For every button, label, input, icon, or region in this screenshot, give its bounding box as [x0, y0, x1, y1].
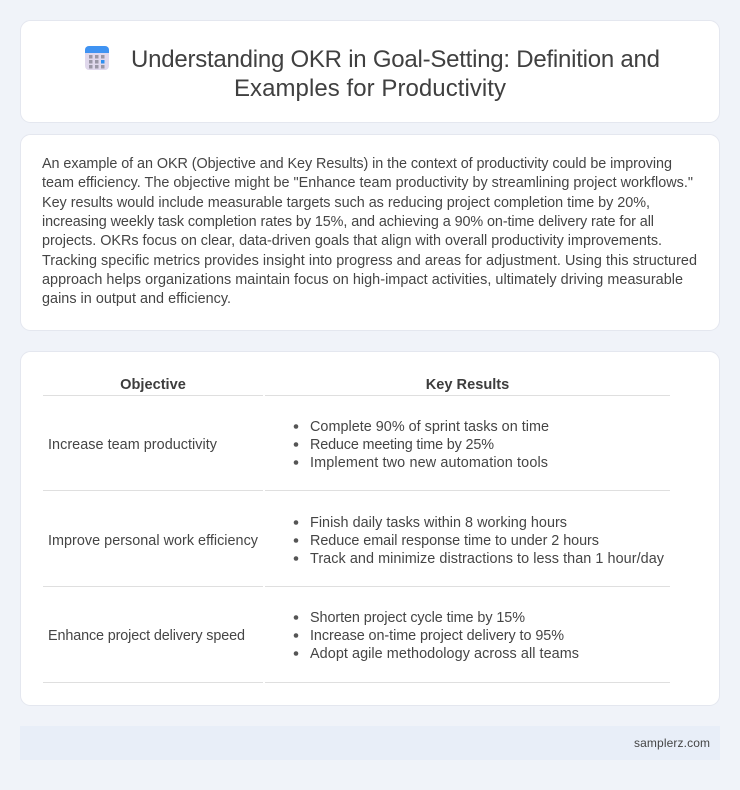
table header: Objective — [120, 377, 186, 393]
panel: OKR table — [20, 352, 720, 706]
row: delivery speed: Adopt agile methodology across all teams — [310, 646, 579, 662]
text block: description paragraph: Tracking specific metrics provides insight into progress and areas for adjustment. Using this structured — [42, 253, 697, 269]
row: delivery speed — [48, 610, 579, 662]
row: personal efficiency: Finish daily tasks within 8 working hours — [310, 515, 567, 531]
footer — [20, 726, 720, 760]
row: team productivity: Complete 90% of sprint tasks on time — [310, 419, 549, 435]
row: personal efficiency — [48, 515, 665, 567]
row: team productivity: Reduce meeting time by 25% — [310, 437, 494, 453]
footer: samplerz.com — [634, 736, 710, 750]
title — [131, 46, 660, 102]
text block: description paragraph: Key results would include measurable targets such as reducing project completion time by 20%, — [42, 195, 650, 211]
table header: Key Results — [426, 377, 509, 393]
row: personal efficiency: Track and minimize distractions to less than 1 hour/day — [310, 551, 665, 567]
text block: description paragraph: team efficiency. The objective might be "Enhance team productivity by streamlining project workflows." — [42, 175, 693, 191]
table header — [120, 377, 509, 393]
row: personal efficiency: Improve personal work efficiency — [48, 533, 259, 549]
row: team productivity — [48, 419, 549, 471]
text block: description paragraph: increasing weekly task completion rates by 15%, and achieving a 90% on-time delivery rate for all — [42, 214, 654, 230]
text block: description paragraph: An example of an OKR (Objective and Key Results) in the context of productivity could be improving — [42, 156, 672, 172]
row: team productivity: Implement two new automation tools — [310, 455, 548, 471]
text block: description paragraph: gains in output and efficiency. — [42, 291, 231, 307]
text block: description paragraph — [42, 156, 697, 307]
title: Examples for Productivity — [234, 75, 506, 102]
row: personal efficiency: Reduce email response time to under 2 hours — [310, 533, 599, 549]
text block: description paragraph: projects. OKRs focus on clear, data-driven goals that align with overall productivity improvements. — [42, 233, 662, 249]
text block: description paragraph: approach helps organizations maintain focus on high-impact activities, ultimately driving measurable — [42, 272, 683, 288]
title: Understanding OKR in Goal-Setting: Definition and — [131, 46, 660, 73]
panel: title card — [20, 20, 720, 122]
row: delivery speed: Shorten project cycle time by 15% — [310, 610, 525, 626]
row: delivery speed: Enhance project delivery speed — [48, 628, 245, 644]
panel: description — [20, 134, 720, 330]
icon: calendar — [85, 46, 109, 70]
row: delivery speed: Increase on-time project delivery to 95% — [310, 628, 564, 644]
row: team productivity: Increase team productivity — [48, 437, 218, 453]
